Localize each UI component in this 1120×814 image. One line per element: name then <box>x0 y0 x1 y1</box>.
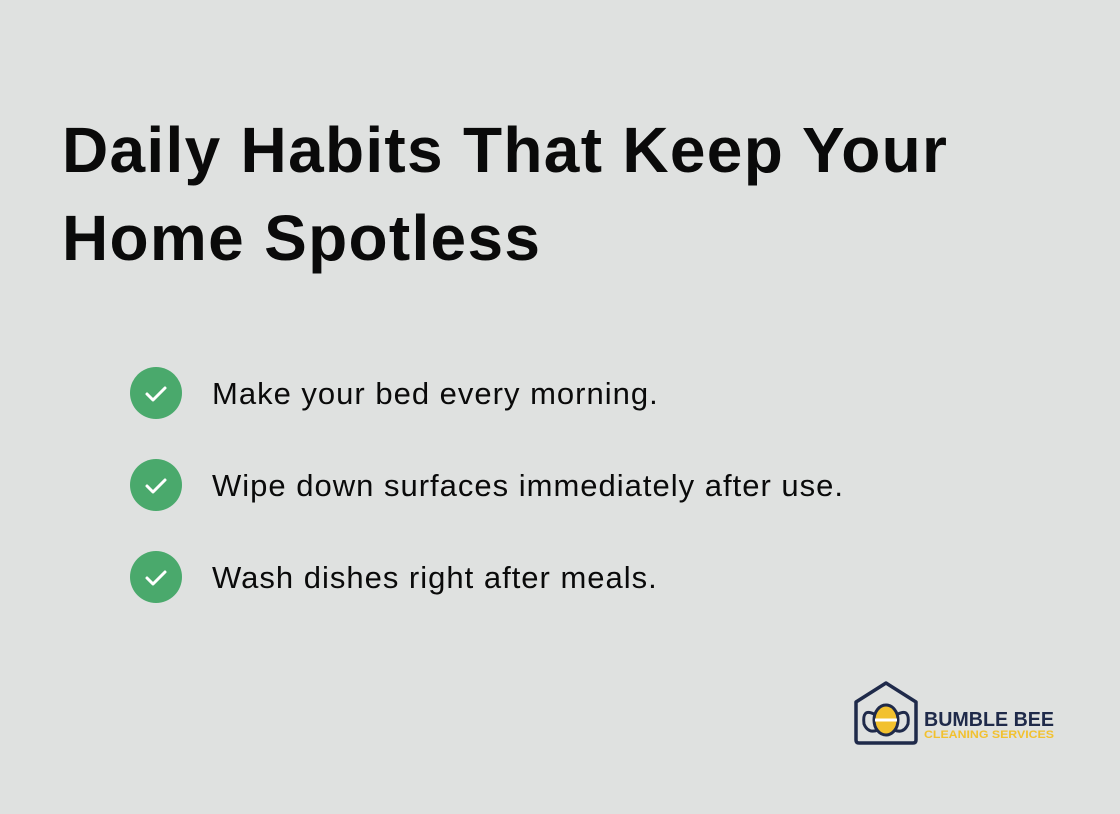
title: Daily Habits That Keep Your <box>62 114 948 186</box>
item 2 <box>130 459 844 511</box>
logo: BUMBLE BEE <box>924 709 1054 731</box>
logo: CLEANING SERVICES <box>924 729 1054 741</box>
item 2: Wipe down surfaces immediately after use. <box>212 468 844 503</box>
item 3 <box>130 551 658 603</box>
item 3: Wash dishes right after meals. <box>212 560 658 595</box>
logo <box>854 681 1054 745</box>
item 1: Make your bed every morning. <box>212 376 659 411</box>
title: Home Spotless <box>62 202 541 274</box>
title <box>62 114 948 274</box>
item 1 <box>130 367 659 419</box>
